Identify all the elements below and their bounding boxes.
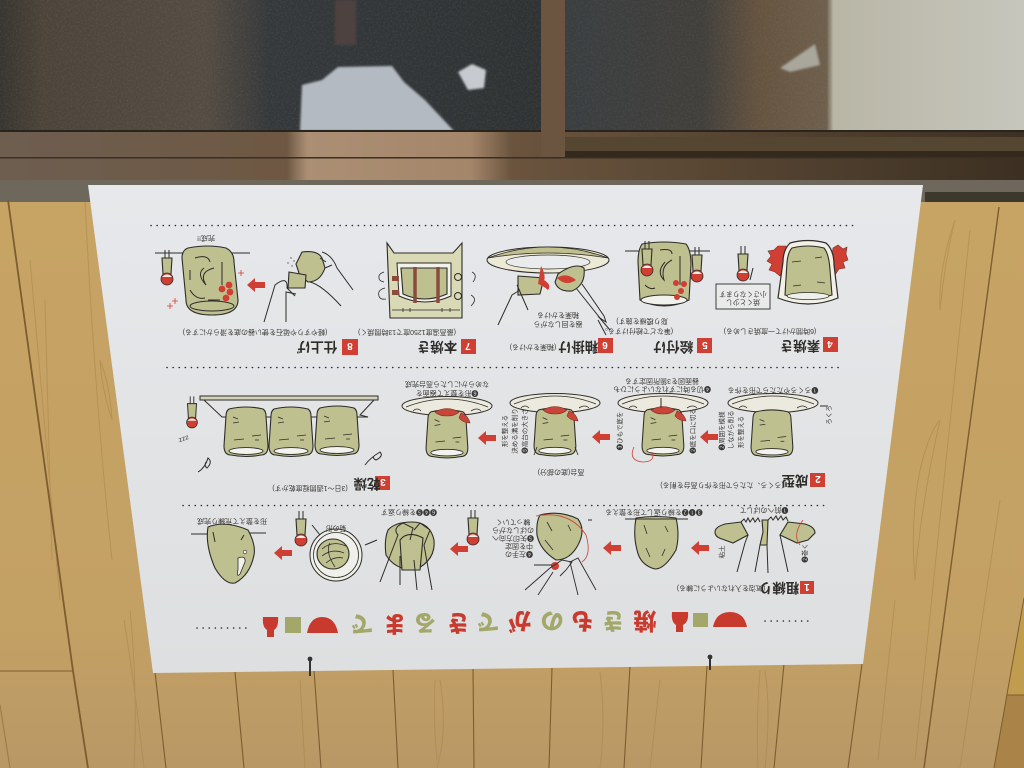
hands on clay: ❺矢印方向へ	[492, 534, 534, 543]
forming 4: ❻形を整えて器面を	[416, 389, 478, 398]
kneading hands: ❷巻く	[800, 543, 809, 563]
forming 2: ❹切る時にずれないようにひも	[613, 385, 711, 394]
step 5 label: (筆などで絵付けする。	[601, 327, 673, 336]
sleeping figure: zzz	[177, 433, 190, 444]
step 6 label: 6	[602, 339, 608, 350]
forming 1	[728, 386, 833, 457]
hands on clay: 中を固定	[505, 542, 533, 551]
step 7 label	[358, 328, 476, 355]
forming 2: 器面図を3箇所固定する	[625, 377, 699, 386]
title: upside-down heading	[197, 608, 811, 637]
painted bowl	[625, 242, 710, 306]
step 1 label: 1	[804, 581, 810, 592]
step 4 label	[724, 327, 838, 354]
window frame	[0, 0, 1024, 205]
step 4: bisque firing	[716, 240, 848, 354]
forming 4	[402, 380, 492, 458]
forming 2: 形を整える	[736, 416, 745, 448]
arrow	[700, 430, 718, 444]
step 6 label: 釉薬をかける	[537, 311, 579, 320]
step 6 label: 器を回しながら	[534, 320, 582, 329]
arrow	[274, 546, 292, 560]
dotted dividers	[151, 226, 856, 506]
step 6 label	[510, 311, 613, 355]
title text: る	[414, 610, 436, 636]
figure and note: 焼くと少し	[726, 298, 760, 307]
title text: で	[350, 611, 374, 637]
figure and note	[716, 246, 770, 309]
title text	[350, 608, 656, 637]
step 2 label: (ろくろ、たたらで形を作り高台を削る)	[660, 481, 784, 490]
step 8 label: 8	[347, 340, 353, 351]
bowl in flames	[767, 240, 848, 304]
title text: が	[508, 608, 532, 634]
step 4 label: (6時間かけて一度焼きしめる)	[724, 327, 816, 336]
glaze ring and cup	[487, 247, 610, 335]
step 6 label: 釉掛け	[558, 339, 598, 355]
step 2 label: 2	[815, 473, 821, 484]
arrow	[603, 541, 621, 555]
step 2 label	[660, 473, 825, 490]
arrow	[691, 541, 709, 555]
title text: 焼	[634, 608, 656, 634]
painter figures	[641, 241, 703, 282]
step 8 label	[183, 328, 358, 355]
title icon right: bowl, block, cup	[672, 612, 747, 632]
figure	[467, 510, 479, 545]
window glass: left pane	[0, 0, 541, 131]
sleeping figure	[177, 396, 197, 444]
kiln	[379, 243, 475, 318]
kneading hands	[715, 506, 815, 573]
step 8: finishing	[155, 234, 358, 355]
step 3 label: 乾燥	[353, 476, 380, 492]
hands on clay	[492, 513, 596, 595]
forming 1: ❶ろくろやたたらで形を作る	[728, 386, 818, 395]
title text: の	[540, 608, 564, 634]
title text: ま	[384, 611, 406, 637]
step 5 label: 絵付け	[653, 339, 693, 355]
forming 2: しながら削る	[726, 410, 735, 450]
kneading hands: 粘土	[717, 545, 726, 558]
step 3 label: 3	[380, 476, 386, 487]
step 8 label: 仕上げ	[296, 339, 337, 355]
forming 4: なめらかにしたら高台完成	[405, 380, 489, 389]
kneading hands: ❶前へのばして	[740, 506, 788, 515]
hands on clay: のばしながら	[492, 526, 534, 535]
arrow	[592, 430, 610, 444]
forming 3: 決める溝を削り	[510, 408, 519, 454]
step 2: forming	[402, 377, 833, 490]
step 3 label: (3日〜1週間程度乾かす)	[272, 484, 348, 493]
figure and note: 小さくなります	[719, 290, 767, 299]
figure	[161, 250, 173, 285]
drying rack with pots	[198, 396, 381, 472]
hands on clay: 練っていく	[496, 518, 530, 527]
step 6 label: (釉薬をかける)	[510, 343, 556, 352]
step 4 label: 4	[827, 338, 833, 349]
step 7: firing	[358, 243, 476, 355]
clay rosette detail	[310, 524, 362, 581]
kneading with both hands	[365, 508, 437, 590]
step 4 label: 素焼き	[780, 338, 820, 354]
step 5 label: 彫り模様を施す)	[616, 317, 668, 326]
forming 3: 形を整える	[500, 415, 509, 447]
step 1 label	[677, 580, 814, 596]
hands polishing	[264, 252, 353, 322]
step 2 label: 成型	[782, 473, 808, 489]
step 5 label	[601, 317, 712, 355]
forming 2: ❷周囲を模様	[717, 411, 726, 450]
figure	[295, 511, 307, 546]
step 7 label: 本焼き	[417, 339, 457, 355]
finished clay	[191, 517, 267, 583]
title text: き	[446, 610, 470, 636]
hands on clay: ❹左手の	[505, 550, 533, 559]
arrow	[247, 278, 265, 292]
forming 3: ❺高台の大きさ	[520, 408, 529, 454]
step 3 label	[272, 476, 390, 493]
title text: で	[476, 609, 500, 635]
step 8 label: (軽やすりや砥石を使い器の底を滑らかにする)	[183, 328, 327, 337]
step 5: painting	[601, 241, 712, 355]
forming 2	[613, 377, 745, 462]
window glass: right pane	[565, 0, 1024, 137]
clay blob: ❸❶❷を繰り返して形を整える	[605, 508, 703, 517]
step 7 label: (最高温度1250度で13時間焼く)	[358, 328, 456, 337]
step 1: kneading	[191, 506, 815, 596]
step 6: glazing	[487, 247, 613, 355]
forming 3: 高台(底の部分)	[538, 468, 584, 477]
step 3: drying	[177, 396, 390, 493]
forming 1: ろくろ	[825, 405, 833, 425]
clay rosette detail: 菊の形	[326, 524, 346, 533]
step 7 label: 7	[465, 340, 471, 351]
step 1 label: (気泡を入れないように練る)	[677, 584, 765, 593]
forming 3	[500, 394, 600, 477]
finished clay: 形を整えて荒練り完成	[197, 517, 267, 526]
step 5 label: 5	[702, 339, 708, 350]
title text: き	[602, 608, 624, 634]
step 1 label: 粗練り	[759, 580, 799, 596]
kneading with both hands: ❻❹❺を繰り返す	[381, 508, 437, 517]
finished bowl: 完成!!	[197, 234, 215, 243]
wood wall	[0, 200, 1024, 768]
forming 2: ❸ひもで底を	[616, 412, 624, 450]
poster sheet	[88, 185, 923, 673]
title text: も	[570, 608, 594, 634]
finished bowl	[155, 234, 250, 315]
nails	[308, 655, 712, 676]
arrow	[450, 542, 468, 556]
forming 2: ❷底を口に切る	[689, 408, 697, 454]
clay blob	[605, 508, 703, 569]
title icon left: bowl, block, cup	[263, 617, 338, 637]
arrow	[478, 431, 496, 445]
